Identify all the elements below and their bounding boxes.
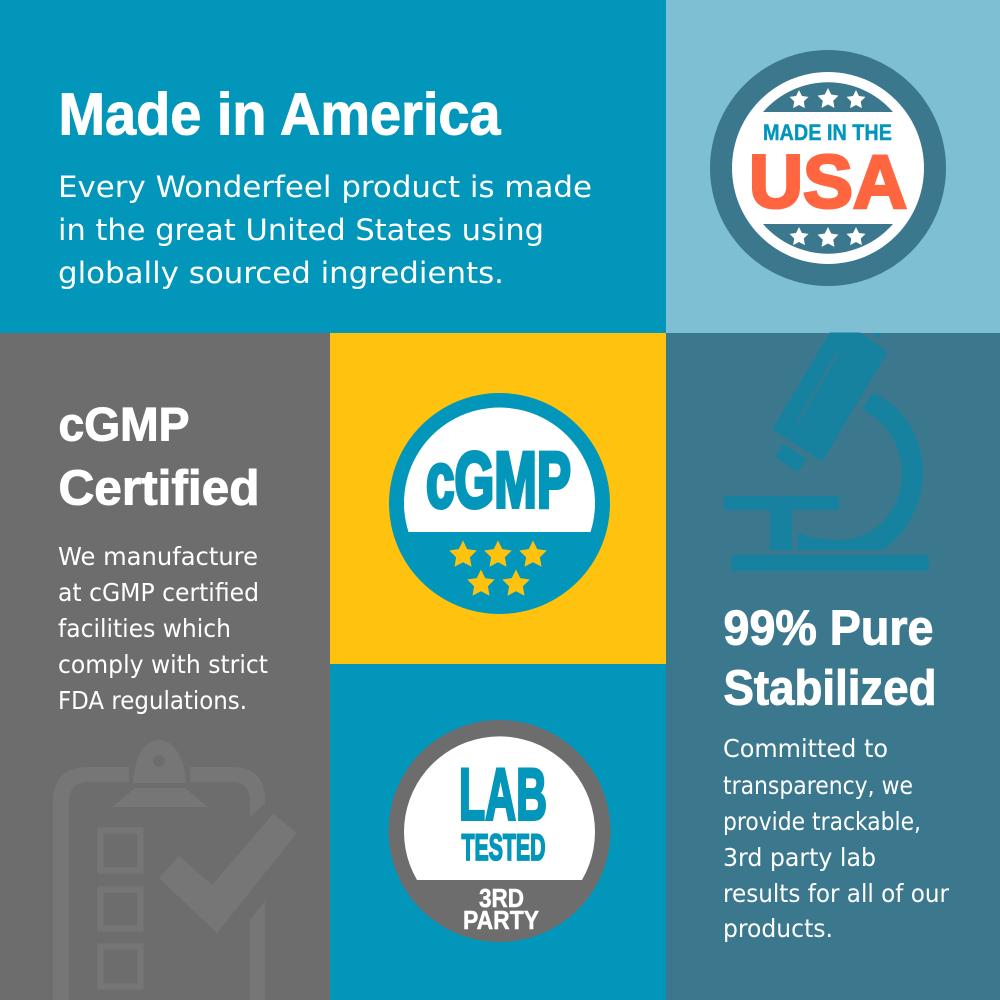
text block: purity description: 3rd party lab	[723, 843, 876, 872]
icon: made in the usa badge: MADE IN THE	[763, 120, 892, 145]
panel: cgmp certified	[0, 333, 330, 1000]
icon: made in the usa badge: USA	[749, 140, 907, 224]
text block: purity description: products.	[723, 914, 833, 943]
panel: lab tested badge	[330, 664, 666, 1000]
text block: made in america description: Every Wonderfeel product is made	[58, 170, 592, 204]
text block: purity description: transparency, we	[723, 771, 913, 800]
panel: 99% pure stabilized	[666, 333, 1000, 1000]
text block: made in america description: in the great United States using	[58, 213, 544, 247]
text block: purity description: provide trackable,	[723, 807, 921, 836]
panel: cgmp badge	[330, 333, 666, 664]
text block: cgmp description: comply with strict	[58, 650, 268, 679]
icon: cgmp badge	[389, 393, 610, 614]
text block: cgmp description: at cGMP certified	[58, 578, 259, 607]
heading: 99% pure stabilized: 99% Pure	[724, 602, 934, 656]
text block: cgmp description	[58, 542, 268, 715]
heading: 99% pure stabilized	[724, 602, 936, 716]
icon: clipboard checklist	[53, 740, 297, 1000]
heading: made in america: Made in America	[58, 82, 502, 148]
text block: purity description: results for all of our	[723, 879, 950, 908]
text block: made in america description: globally sourced ingredients.	[58, 256, 504, 290]
icon: cgmp badge: cGMP	[426, 435, 571, 524]
text block: cgmp description: facilities which	[58, 614, 231, 643]
icon: made in the usa badge	[710, 50, 946, 286]
heading: 99% pure stabilized: Stabilized	[724, 662, 936, 716]
text block: cgmp description: FDA regulations.	[58, 686, 247, 715]
icon: lab tested badge	[388, 720, 610, 942]
text block: purity description: Committed to	[723, 734, 888, 763]
text block: made in america description	[58, 170, 592, 290]
icon: microscope	[724, 333, 929, 571]
panel: usa badge	[666, 0, 1000, 333]
panel: made in america	[0, 0, 666, 333]
icon: lab tested badge: TESTED	[462, 827, 546, 868]
text block: purity description	[723, 734, 950, 943]
text block: cgmp description: We manufacture	[58, 542, 258, 571]
heading: cgmp certified	[58, 398, 260, 516]
icon: lab tested badge: PARTY	[463, 907, 539, 935]
heading: cgmp certified: cGMP	[58, 398, 190, 450]
heading: cgmp certified: Certified	[58, 462, 260, 516]
icon: lab tested badge: 3RD	[479, 885, 524, 913]
icon: lab tested badge: LAB	[459, 754, 547, 836]
